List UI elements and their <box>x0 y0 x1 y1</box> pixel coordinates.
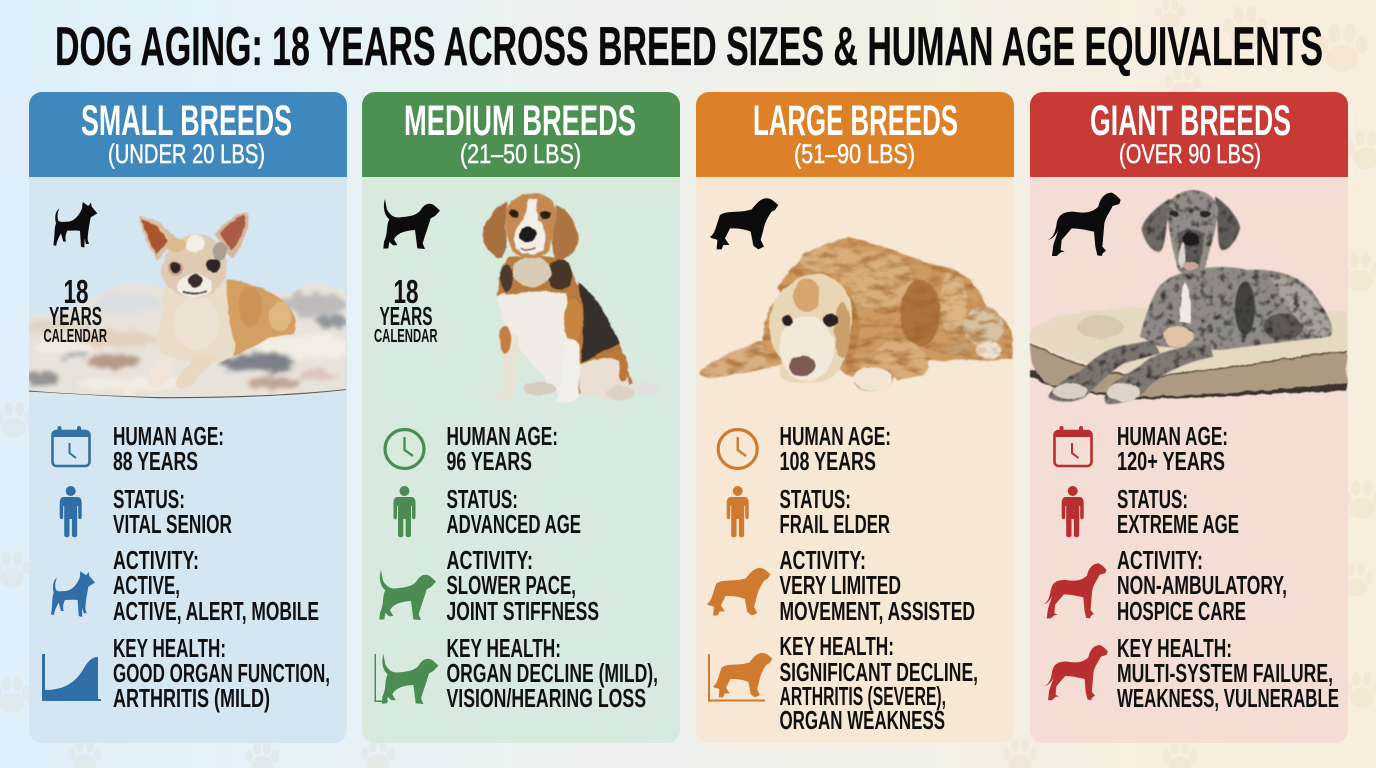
calendar years: 18: 18 <box>394 273 418 310</box>
header: small breeds <box>29 92 347 177</box>
row: human age: HUMAN AGE: <box>1117 421 1228 451</box>
row: activity: JOINT STIFFNESS <box>446 596 599 626</box>
row: activity <box>51 545 319 626</box>
row: key health: ARTHRITIS (MILD) <box>113 683 270 713</box>
row: status: ADVANCED AGE <box>446 509 581 539</box>
calendar years: 18: CALENDAR <box>374 326 438 346</box>
row: key health: ORGAN DECLINE (MILD), <box>446 658 658 688</box>
row: activity: SLOWER PACE, <box>446 570 576 600</box>
header: small breeds: SMALL BREEDS <box>81 97 292 145</box>
photo: beagle sitting <box>483 193 659 403</box>
header: large breeds: (51–90 LBS) <box>794 139 915 169</box>
row: human age: 120+ YEARS <box>1117 446 1225 476</box>
row: activity: MOVEMENT, ASSISTED <box>780 596 975 626</box>
row: human age: 96 YEARS <box>446 446 532 476</box>
row: human age: HUMAN AGE: <box>446 421 558 451</box>
row: key health: SIGNIFICANT DECLINE, <box>780 657 978 687</box>
row: key health <box>1044 633 1339 713</box>
calendar years: 18 <box>44 273 107 346</box>
row: activity: ACTIVITY: <box>1117 545 1203 575</box>
header: small breeds: (UNDER 20 LBS) <box>108 139 265 169</box>
icon: large dog silhouette <box>710 198 778 249</box>
header: medium breeds <box>362 92 680 177</box>
row: status <box>60 484 232 539</box>
row: activity <box>1043 545 1287 626</box>
row: key health: GOOD ORGAN FUNCTION, <box>113 658 330 688</box>
panel: small breeds <box>25 92 357 743</box>
calendar years: 18 <box>374 273 438 346</box>
row: activity: ACTIVITY: <box>780 545 866 575</box>
header: large breeds: LARGE BREEDS <box>753 97 958 145</box>
row: activity <box>379 545 599 626</box>
header: giant breeds <box>1030 92 1348 177</box>
row: activity: ACTIVE, ALERT, MOBILE <box>113 596 319 626</box>
row: status: STATUS: <box>1117 484 1188 514</box>
calendar years: 18: YEARS <box>380 301 432 331</box>
row: status: STATUS: <box>780 484 851 514</box>
header: large breeds <box>696 92 1014 177</box>
icon: small dog silhouette <box>53 202 97 248</box>
row: status: STATUS: <box>113 484 185 514</box>
row: activity: HOSPICE CARE <box>1117 596 1246 626</box>
panel: large breeds <box>696 92 1014 743</box>
row: key health: ARTHRITIS (SEVERE), <box>780 681 946 711</box>
row: human age <box>385 421 558 476</box>
row: human age: HUMAN AGE: <box>113 421 224 451</box>
panel: giant breeds <box>1030 92 1348 743</box>
row: key health: KEY HEALTH: <box>446 633 561 663</box>
row: status: STATUS: <box>446 484 518 514</box>
row: status <box>727 484 890 539</box>
row: human age: HUMAN AGE: <box>780 421 891 451</box>
calendar years: 18: YEARS <box>49 301 102 331</box>
header: medium breeds: MEDIUM BREEDS <box>404 97 636 145</box>
calendar years: 18: 18 <box>64 273 88 310</box>
row: status: VITAL SENIOR <box>113 509 232 539</box>
calendar years: 18: CALENDAR <box>44 326 107 346</box>
photo: golden retriever lying down <box>700 237 1013 391</box>
row: activity: ACTIVITY: <box>446 545 533 575</box>
row: key health <box>374 633 658 713</box>
row: activity: ACTIVE, <box>113 570 180 600</box>
row: key health: KEY HEALTH: <box>1117 633 1232 663</box>
header: medium breeds: (21–50 LBS) <box>460 139 581 169</box>
row: status: EXTREME AGE <box>1117 509 1239 539</box>
photo: chihuahua on blanket <box>25 212 357 400</box>
row: human age <box>1054 421 1228 476</box>
row: activity: VERY LIMITED <box>780 570 901 600</box>
row: activity <box>707 545 975 626</box>
row: key health: VISION/HEARING LOSS <box>446 683 646 713</box>
row: status <box>394 484 581 539</box>
row: key health: ORGAN WEAKNESS <box>780 705 945 735</box>
icon: giant dog silhouette <box>1047 193 1121 256</box>
panel: medium breeds <box>362 92 680 743</box>
icon: medium dog silhouette <box>383 199 440 249</box>
row: human age <box>718 421 891 476</box>
row: human age: 108 YEARS <box>780 446 876 476</box>
row: key health: KEY HEALTH: <box>113 633 226 663</box>
row: key health <box>708 631 978 735</box>
row: human age <box>52 421 224 476</box>
row: status: FRAIL ELDER <box>780 509 890 539</box>
header: giant breeds: (OVER 90 LBS) <box>1119 139 1261 169</box>
row: key health <box>42 633 330 713</box>
row: status <box>1062 484 1239 539</box>
photo: great dane on bed <box>1030 190 1347 404</box>
row: key health: KEY HEALTH: <box>780 631 894 661</box>
row: activity: ACTIVITY: <box>113 545 199 575</box>
row: human age: 88 YEARS <box>113 446 198 476</box>
row: activity: NON-AMBULATORY, <box>1117 570 1287 600</box>
